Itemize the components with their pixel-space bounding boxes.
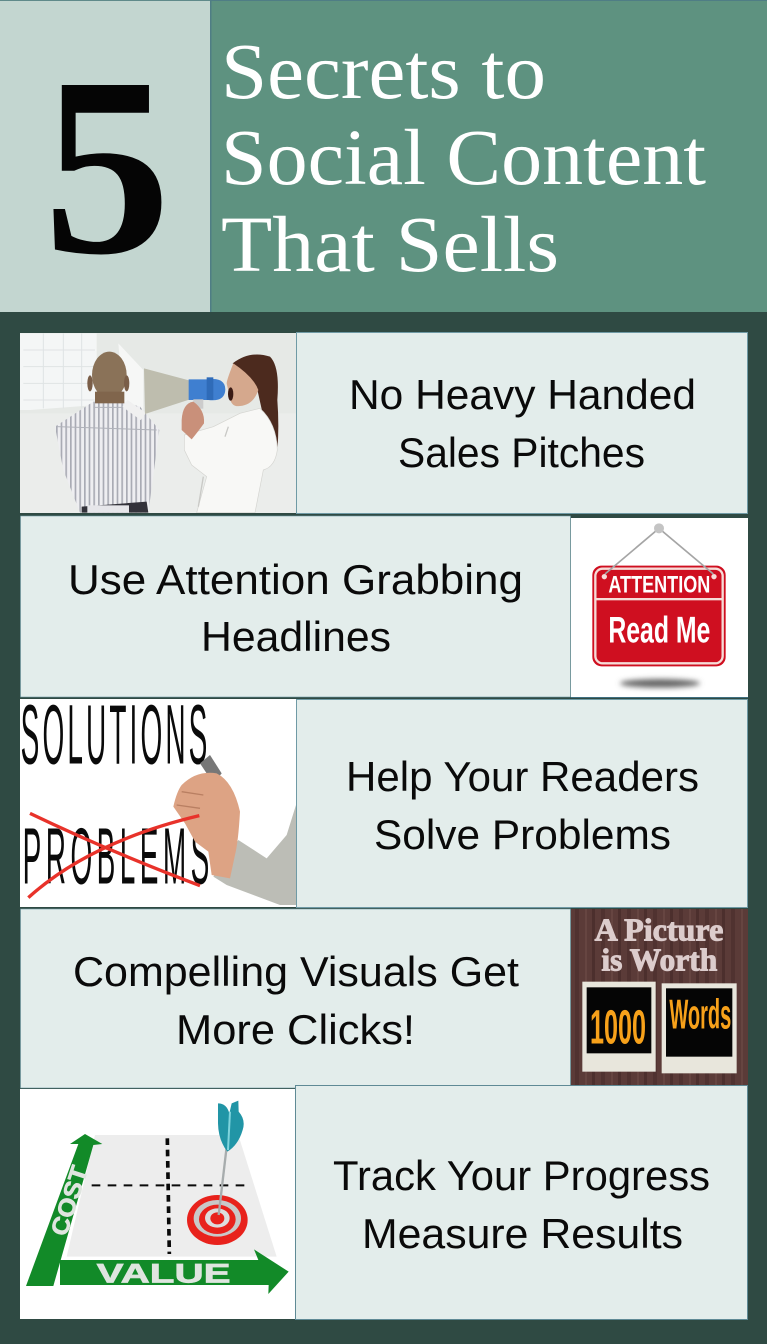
text panel: Sales Pitches [398, 429, 645, 476]
text panel: Track Your Progress [333, 1152, 710, 1199]
image: attention sign: Read Me [608, 609, 710, 651]
image: a picture is worth 1000 words: 1000 [590, 1000, 646, 1054]
title text [221, 29, 706, 289]
text panel: Help Your Readers [346, 753, 699, 800]
image: attention sign [571, 518, 748, 697]
text panel [296, 700, 748, 908]
text panel: Headlines [201, 613, 391, 660]
image: solutions vs problems [20, 688, 297, 909]
text panel: Measure Results [362, 1210, 683, 1257]
title text: That Sells [221, 202, 559, 289]
text panel: Use Attention Grabbing [68, 556, 523, 603]
text panel: No Heavy Handed [349, 371, 696, 418]
image: solutions vs problems: PROBLEMS [23, 811, 209, 901]
row 3: solve problems [20, 688, 747, 909]
row 1: no sales pitches [20, 330, 747, 514]
header panel: number 5 [0, 0, 211, 312]
text panel [296, 1086, 748, 1320]
image: megaphone [20, 330, 297, 513]
header panel: title [210, 0, 767, 312]
text panel: Compelling Visuals Get [73, 948, 519, 995]
image: attention sign: ATTENTION [608, 572, 710, 599]
row 5: track progress [20, 1086, 747, 1320]
image: a picture is worth 1000 words [571, 909, 748, 1085]
image: solutions vs problems: SOLUTIONS [21, 688, 207, 782]
image: a picture is worth 1000 words: A Picture [595, 912, 723, 948]
image: cost value matrix: VALUE [97, 1259, 231, 1289]
image: a picture is worth 1000 words: is Worth [601, 942, 718, 978]
text panel [20, 516, 570, 697]
text panel: Solve Problems [374, 811, 671, 858]
image: cost value matrix: COST [46, 1162, 94, 1239]
row 4: compelling visuals [20, 909, 748, 1088]
image: cost value matrix [20, 1089, 295, 1319]
big number 5: 5 [43, 26, 171, 308]
text panel: More Clicks! [176, 1006, 415, 1053]
title text: Social Content [221, 115, 706, 202]
text panel [296, 332, 748, 514]
text panel [20, 909, 570, 1088]
row 2: headlines [20, 516, 748, 698]
title text: Secrets to [221, 29, 546, 116]
